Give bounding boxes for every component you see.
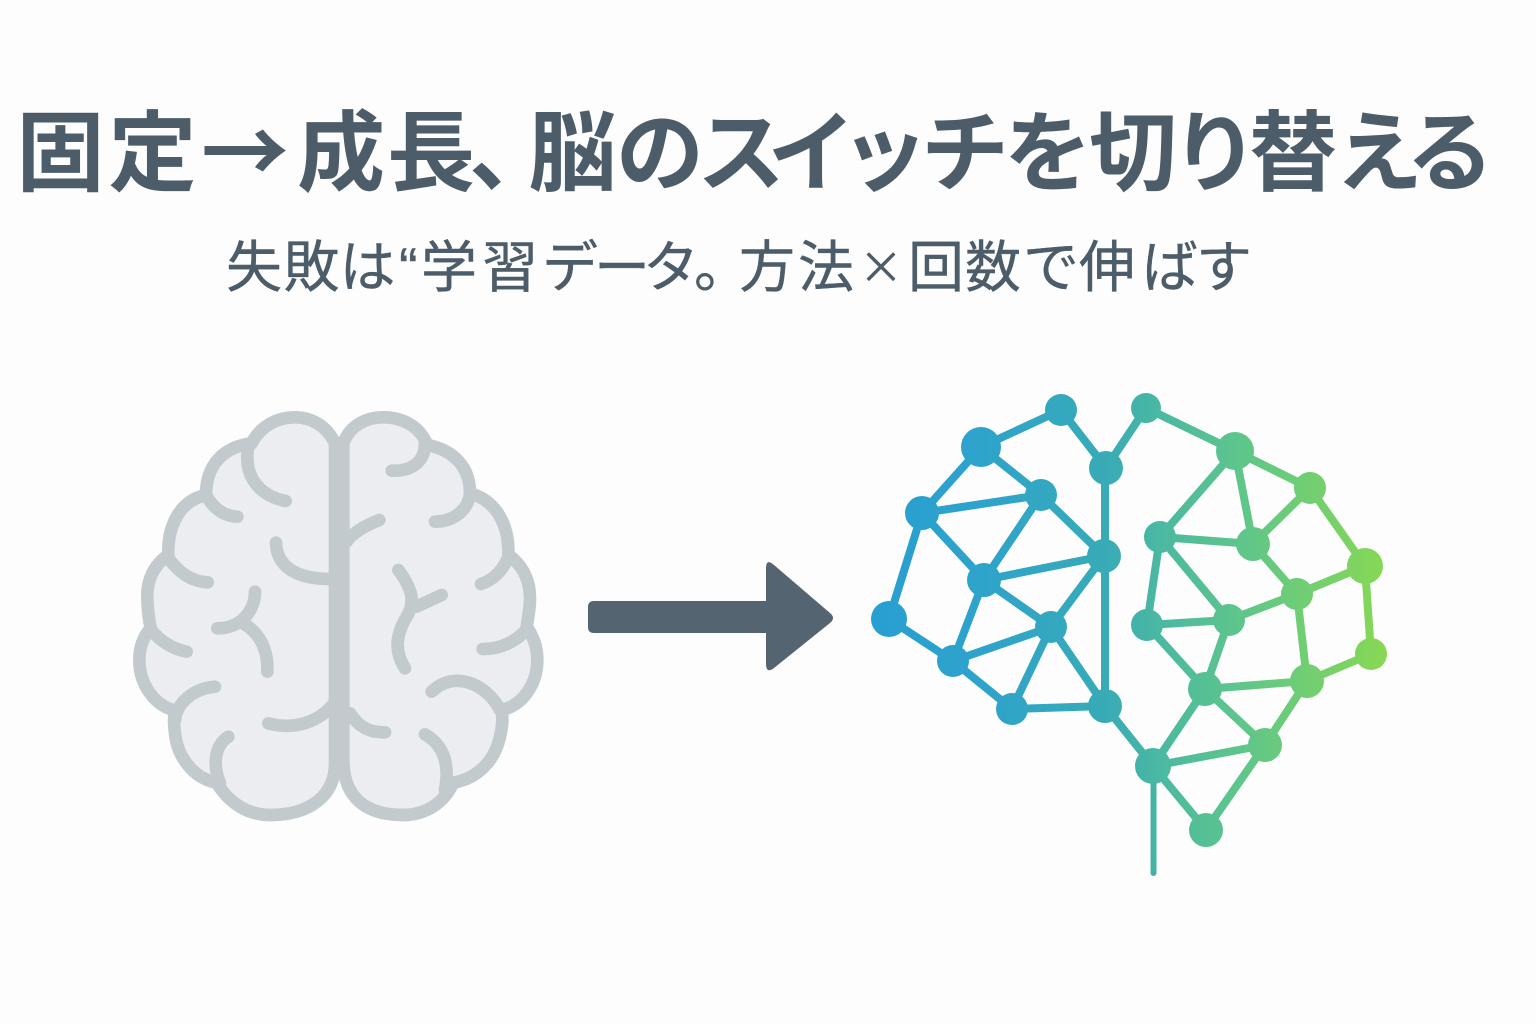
left hemisphere folds (151, 447, 337, 783)
icon: grey fixed brain (139, 417, 537, 815)
subtitle: 失敗は“学習データ。方法 (226, 236, 854, 299)
right hemisphere outline (343, 417, 537, 815)
title: 固定→成長、脳のスイッチを切り替える (16, 83, 1494, 210)
network connections (889, 408, 1371, 830)
icon: neural network brain (871, 393, 1387, 873)
stem (1150, 766, 1156, 873)
network nodes (871, 393, 1387, 847)
subtitle: 回数で伸ばす (908, 236, 1252, 299)
arrow (588, 562, 833, 670)
right hemisphere folds (347, 443, 527, 790)
subtitle: × (859, 232, 903, 296)
left hemisphere outline (139, 417, 335, 815)
central fissure (309, 445, 368, 775)
